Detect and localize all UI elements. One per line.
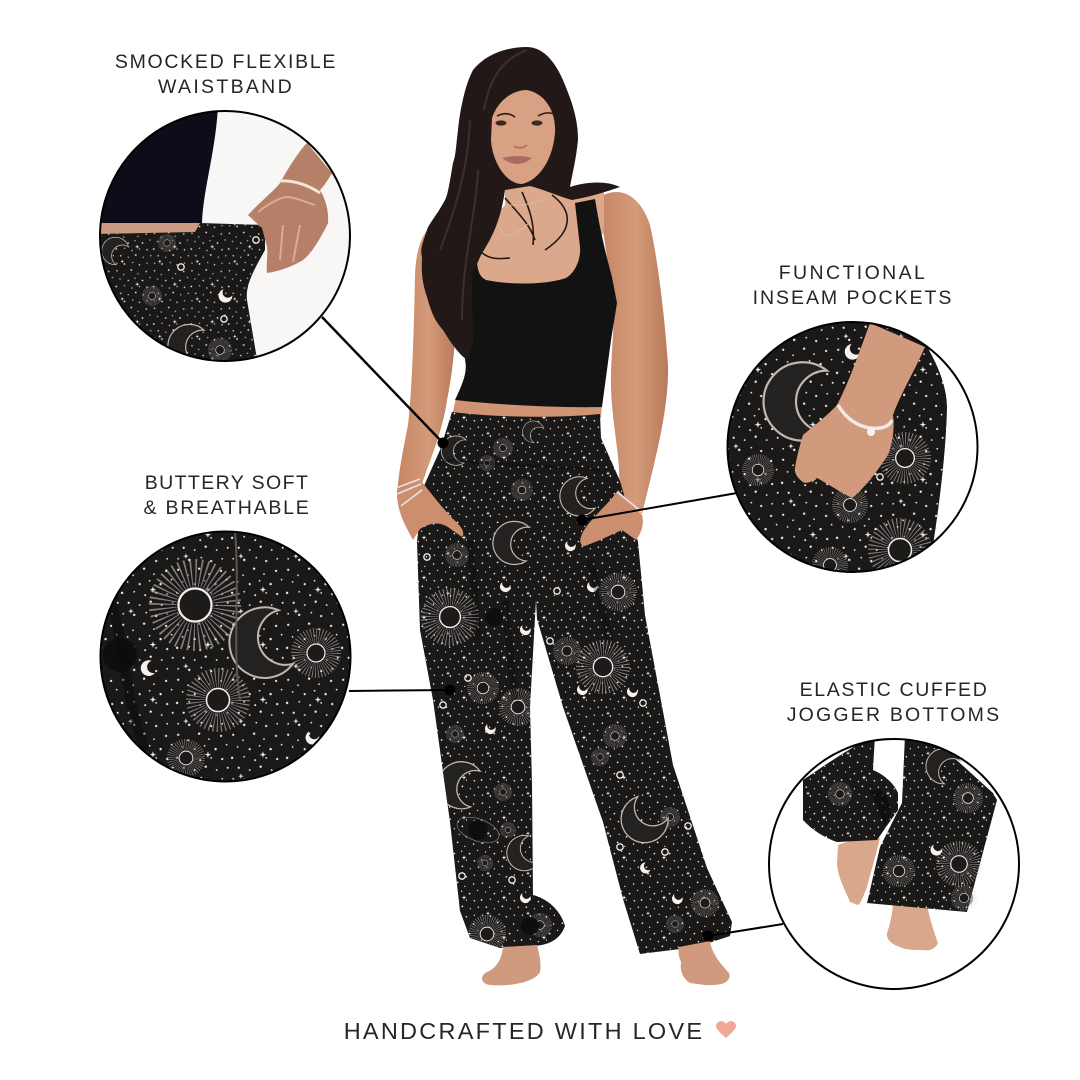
left arm: [397, 222, 455, 496]
right hand in pocket: [580, 490, 643, 546]
cuffs heading: ELASTIC CUFFED: [800, 679, 988, 701]
footer tagline: HANDCRAFTED WITH LOVE: [344, 1018, 704, 1044]
leader line: cuffs: [702, 924, 783, 942]
panel: pockets callout: [725, 262, 980, 578]
leader line: pockets: [576, 493, 737, 526]
icon: heart: [716, 1021, 736, 1038]
patterned harem pants: [417, 412, 732, 954]
left bracelets: [396, 479, 422, 506]
face: [491, 90, 555, 184]
cuffs heading: JOGGER BOTTOMS: [787, 704, 1001, 726]
fabric heading: & BREATHABLE: [144, 497, 310, 519]
chest and neck: [470, 160, 604, 285]
fabric heading: BUTTERY SOFT: [145, 472, 309, 494]
pockets heading: FUNCTIONAL: [779, 262, 927, 284]
right bare foot: [678, 941, 730, 985]
right bracelet: [617, 492, 642, 512]
left bare foot: [482, 945, 541, 985]
left hand in pocket: [397, 482, 463, 540]
panel: cuffs callout: [769, 679, 1019, 989]
black tank top: [455, 199, 617, 407]
model figure: [396, 47, 750, 985]
waistband close-up photo: [101, 112, 349, 360]
waistband heading: WAISTBAND: [158, 76, 294, 98]
leader line: waistband: [322, 317, 448, 448]
infographic canvas: [99, 47, 1020, 1039]
waistband heading: SMOCKED FLEXIBLE: [115, 51, 337, 73]
midriff: [452, 398, 602, 418]
right arm: [598, 192, 668, 514]
hair strands over chest: [481, 192, 567, 259]
pockets close-up photo: [728, 323, 947, 571]
panel: waistband callout: [95, 51, 350, 374]
panel: fabric callout: [100, 472, 352, 783]
pockets heading: INSEAM POCKETS: [753, 287, 953, 309]
leader line: fabric: [349, 684, 456, 696]
fabric close-up photo: [100, 531, 352, 783]
facial features: [496, 113, 554, 164]
hair highlights: [440, 50, 527, 320]
cuffs close-up photo: [803, 740, 997, 950]
necklace: [498, 198, 548, 236]
long dark hair: [421, 47, 620, 360]
